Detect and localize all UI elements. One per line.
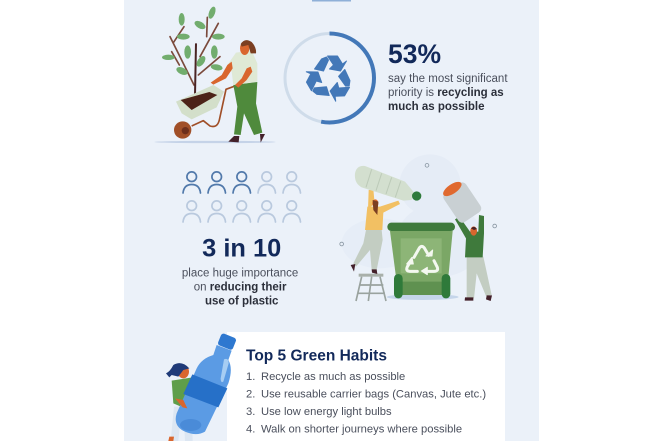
man lifting jar	[441, 179, 492, 301]
list: habits: Walk on shorter journeys where possible	[261, 423, 462, 435]
list: habits: Use low energy light bulbs	[261, 406, 392, 418]
donut chart: 53 percent	[285, 34, 374, 122]
icon: bin recycling symbol	[407, 246, 438, 275]
text: recycling priority: much as possible	[388, 101, 485, 113]
text: recycling priority: say the most significant	[388, 73, 508, 85]
text: reducing plastic: on reducing their	[194, 282, 286, 294]
illustration: woman carrying water bottle	[166, 333, 237, 441]
list: habits: Recycle as much as possible	[261, 371, 405, 383]
water bottle	[176, 333, 237, 434]
pictogram: 3 in 10 people	[183, 172, 300, 222]
panel: top 5 green habits card	[227, 332, 505, 441]
list: habits	[246, 371, 486, 435]
stat: 53 percent: 53%	[388, 39, 441, 69]
heading: top 5 green habits: Top 5 Green Habits	[246, 348, 387, 364]
top divider stub	[312, 0, 351, 2]
list: habits: 1.	[246, 371, 255, 383]
text: reducing plastic: use of plastic	[205, 296, 279, 308]
list: habits: 2.	[246, 389, 255, 401]
icon: recycling arrows	[302, 56, 356, 104]
illustration: woman with wheelbarrow and tree	[154, 6, 276, 143]
woman lifting bottle	[351, 166, 421, 274]
text: recycling priority: priority is recycling as	[388, 87, 504, 99]
list: habits: Use reusable carrier bags (Canvas, Jute etc.)	[261, 389, 486, 401]
step stool	[356, 274, 386, 301]
illustration: people recycling at a bin	[340, 154, 496, 301]
text: reducing plastic: place huge importance	[182, 268, 298, 280]
panel: background	[124, 0, 539, 441]
stat: 3 in 10: 3 in 10	[202, 235, 281, 263]
list: habits: 3.	[246, 406, 255, 418]
list: habits: 4.	[246, 423, 255, 435]
